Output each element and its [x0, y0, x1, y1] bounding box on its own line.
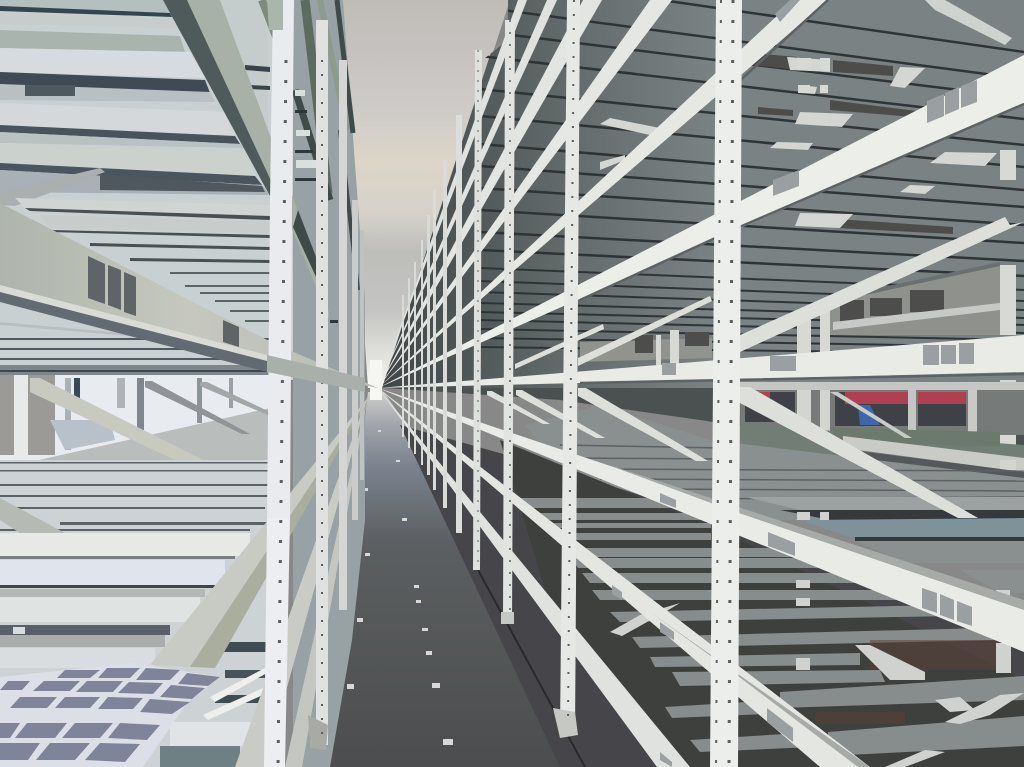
beam under-edges [580, 0, 1024, 383]
QR labels on left beam [88, 256, 239, 347]
right rack: gaps and cross bars seen through upper shelves [580, 0, 1012, 362]
upright perforations [478, 0, 733, 767]
left rack: upper shelf bands [0, 0, 300, 380]
right rack: distant uprights upper [656, 58, 1016, 520]
right rack: lower level slats [525, 405, 1024, 593]
right rack: back bay with red racking [740, 382, 1024, 515]
sheet of QR labels [0, 663, 220, 767]
left rack: bright background bay [0, 375, 290, 470]
right rack: diagonal braces [487, 217, 1024, 518]
left rack: big foreground beam [0, 203, 378, 388]
right rack: bottom level slats [500, 440, 1024, 767]
left rack: lower foreground beams [150, 395, 370, 767]
aisle floor [325, 392, 1024, 767]
left rack: lower shelf slats [0, 460, 270, 767]
vanishing-point glow [370, 360, 382, 400]
right rack: upper shelf slats [382, 0, 1024, 470]
left rack: right-hand narrow bays [220, 0, 365, 767]
QR labels on right beams [612, 0, 977, 767]
left beam side rail [267, 355, 365, 392]
left rack: diagonal top beam [163, 0, 330, 320]
ceiling [342, 0, 510, 388]
right rack: uprights [402, 0, 742, 767]
right rack: white beams [378, 0, 1024, 767]
left rack: uprights [264, 0, 364, 767]
